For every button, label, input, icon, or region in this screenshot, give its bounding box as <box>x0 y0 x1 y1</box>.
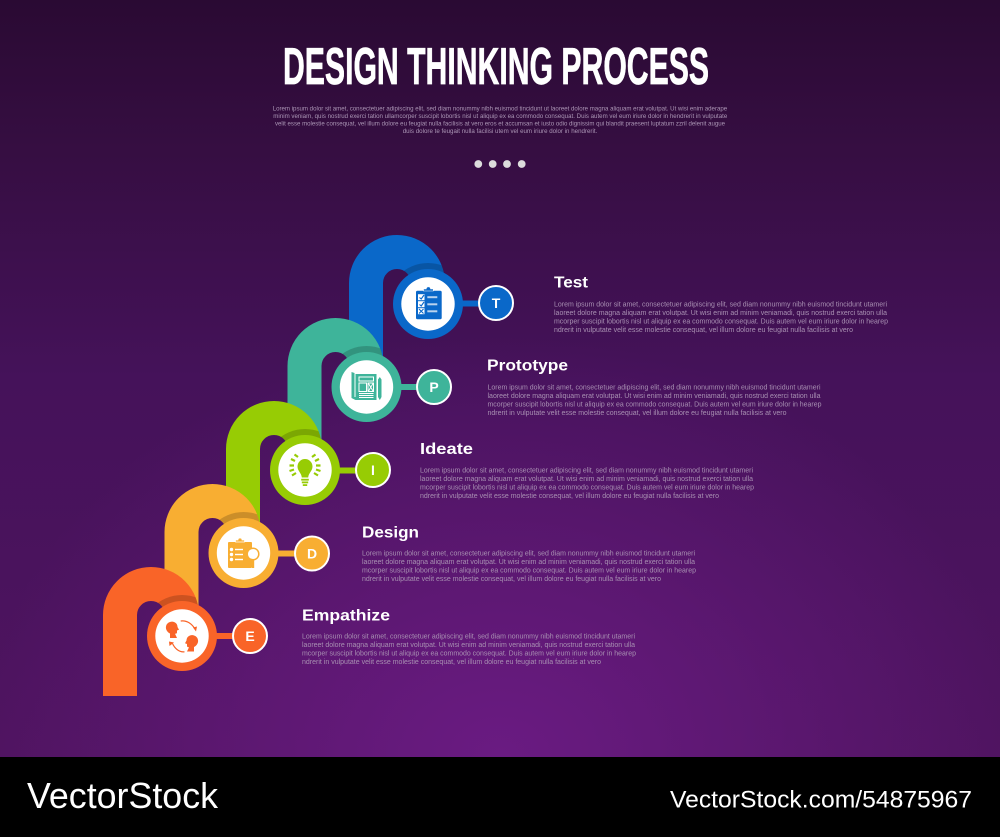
text block: Ideate: Ideate <box>420 441 473 458</box>
text block: Ideate: Lorem ipsum dolor sit amet, consectetuer adipiscing elit, sed diam nonummy nibh euismod tincidunt utameri <box>420 468 753 474</box>
text block: Test <box>554 274 888 334</box>
arch: Design <box>182 501 244 609</box>
text block: Prototype: Prototype <box>487 358 568 374</box>
step: Test <box>366 252 513 360</box>
text block: Empathize: laoreet dolore magna aliquam erat volutpat. Ut wisi enim ad minim veniamadi, quis nostrud exerci tation ulla <box>302 642 635 649</box>
arch shadow: Prototype <box>342 346 382 358</box>
badge: D: D <box>307 546 317 562</box>
step: Prototype <box>304 335 451 443</box>
intro paragraph: Lorem ipsum dolor sit amet, consectetuer adipiscing elit, sed diam nonummy nibh euismod tincidunt ut laoreet dolore magna aliquam erat volutpat. Ut wisi enim aderape <box>273 106 727 112</box>
text block: Empathize: Empathize <box>302 608 390 624</box>
text block: Prototype <box>487 358 822 417</box>
step: Ideate <box>243 418 390 526</box>
badge: P <box>417 370 451 404</box>
text block: Ideate: mcorper suscipit lobortis nisl ut aliquip ex ea commodo consequat. Duis autem vel eum iriure dolor in hearep <box>420 484 754 492</box>
arch: Prototype <box>304 335 366 443</box>
arch: Empathize <box>120 584 182 696</box>
pagination dots <box>474 160 526 168</box>
footer logo text: VectorStock <box>27 775 219 816</box>
text block: Empathize: Lorem ipsum dolor sit amet, consectetuer adipiscing elit, sed diam nonummy nibh euismod tincidunt utameri <box>302 634 635 640</box>
badge: T: T <box>492 295 501 311</box>
icon: light bulb <box>290 454 320 486</box>
text block: Empathize: mcorper suscipit lobortis nisl ut aliquip ex ea commodo consequat. Duis autem vel eum iriure dolor in hearep <box>302 650 636 658</box>
text block: Test: mcorper suscipit lobortis nisl ut aliquip ex ea commodo consequat. Duis autem vel eum iriure dolor in hearep <box>554 318 888 326</box>
connector: Ideate <box>332 468 362 474</box>
step: Empathize <box>120 584 267 696</box>
intro paragraph <box>273 106 728 135</box>
text block: Ideate: ndrerit in vulputate velit esse molestie consequat, vel illum dolore eu feugiat nulla facilisis at vero <box>420 493 719 500</box>
text block: Prototype: ndrerit in vulputate velit esse molestie consequat, vel illum dolore eu feugiat nulla facilisis at vero <box>488 410 787 417</box>
badge: I <box>356 453 390 487</box>
text block: Empathize <box>302 608 636 666</box>
text block: Test: Lorem ipsum dolor sit amet, consectetuer adipiscing elit, sed diam nonummy nibh euismod tincidunt utameri <box>554 302 887 308</box>
footer image id: VectorStock.com/54875967 <box>670 786 972 814</box>
text block: Test: ndrerit in vulputate velit esse molestie consequat, vel illum dolore eu feugiat nulla facilisis at vero <box>554 327 853 334</box>
icon ring: Design <box>208 518 278 588</box>
icon ring: Prototype <box>332 352 402 422</box>
icon: two heads with arrows <box>166 621 198 652</box>
footer bar <box>0 757 1000 837</box>
text block: Ideate <box>420 441 754 500</box>
text block: Design: laoreet dolore magna aliquam erat volutpat. Ut wisi enim ad minim veniamadi, quis nostrud exerci tation ulla <box>362 559 695 566</box>
connector: Empathize <box>209 633 239 639</box>
text block: Design: ndrerit in vulputate velit esse molestie consequat, vel illum dolore eu feugiat nulla facilisis at vero <box>362 576 661 583</box>
connector: Prototype <box>393 384 423 390</box>
badge: D <box>295 536 329 570</box>
arch shadow: Design <box>220 512 260 524</box>
text block: Design <box>362 524 696 583</box>
connector: Design <box>270 550 300 556</box>
intro paragraph: minim veniam, quis nostrud exerci tation ullamcorper suscipit lobortis nisl ut aliquip ex ea commodo consequat. Duis autem vel eum iriure dolor in hendrerit in vulputate <box>273 113 728 120</box>
text block: Prototype: laoreet dolore magna aliquam erat volutpat. Ut wisi enim ad minim veniamadi, quis nostrud exerci tation ulla <box>488 393 821 400</box>
text block: Empathize: ndrerit in vulputate velit esse molestie consequat, vel illum dolore eu feugiat nulla facilisis at vero <box>302 659 601 666</box>
icon: clipboard with magnifier <box>228 538 259 568</box>
arch shadow: Test <box>404 263 444 275</box>
icon ring: Ideate <box>270 435 340 505</box>
badge: E <box>233 619 267 653</box>
title: DESIGN THINKING PROCESS <box>283 38 709 96</box>
text block: Ideate: laoreet dolore magna aliquam erat volutpat. Ut wisi enim ad minim veniamadi, quis nostrud exerci tation ulla <box>420 476 753 483</box>
arch shadow: Empathize <box>158 595 198 607</box>
text block: Design: Lorem ipsum dolor sit amet, consectetuer adipiscing elit, sed diam nonummy nibh euismod tincidunt utameri <box>362 550 695 558</box>
icon ring: Test <box>393 269 463 339</box>
arch shadow: Ideate <box>281 429 321 441</box>
badge: T <box>479 286 513 320</box>
badge: P: P <box>429 379 439 395</box>
icon ring: Empathize <box>147 601 217 671</box>
icon: clipboard checklist <box>416 287 442 319</box>
step: Design <box>182 501 329 609</box>
text block: Design: Design <box>362 524 419 542</box>
text block: Prototype: Lorem ipsum dolor sit amet, consectetuer adipiscing elit, sed diam nonummy nibh euismod tincidunt utameri <box>488 384 821 392</box>
icon: blueprint and pencil <box>352 372 382 400</box>
badge: E: E <box>245 628 255 644</box>
text block: Test: laoreet dolore magna aliquam erat volutpat. Ut wisi enim ad minim veniamadi, quis nostrud exerci tation ulla <box>554 310 887 317</box>
arch: Ideate <box>243 418 305 526</box>
connector: Test <box>455 300 485 306</box>
text block: Test: Test <box>554 274 589 292</box>
arch: Test <box>366 252 428 360</box>
intro paragraph: duis dolore te feugait nulla facilisi utem vel eum iriure dolor in hendrerit. <box>403 128 597 135</box>
badge: I: I <box>371 462 375 478</box>
text block: Prototype: mcorper suscipit lobortis nisl ut aliquip ex ea commodo consequat. Duis autem vel eum iriure dolor in hearep <box>488 402 822 408</box>
intro paragraph: velit esse molestie consequat, vel illum dolore eu feugiat nulla facilisis at vero eros et accumsan et iusto odio dignissim qui blandit praesent luptatum zzril delenit augue <box>275 120 725 128</box>
text block: Design: mcorper suscipit lobortis nisl ut aliquip ex ea commodo consequat. Duis autem vel eum iriure dolor in hearep <box>362 568 696 574</box>
